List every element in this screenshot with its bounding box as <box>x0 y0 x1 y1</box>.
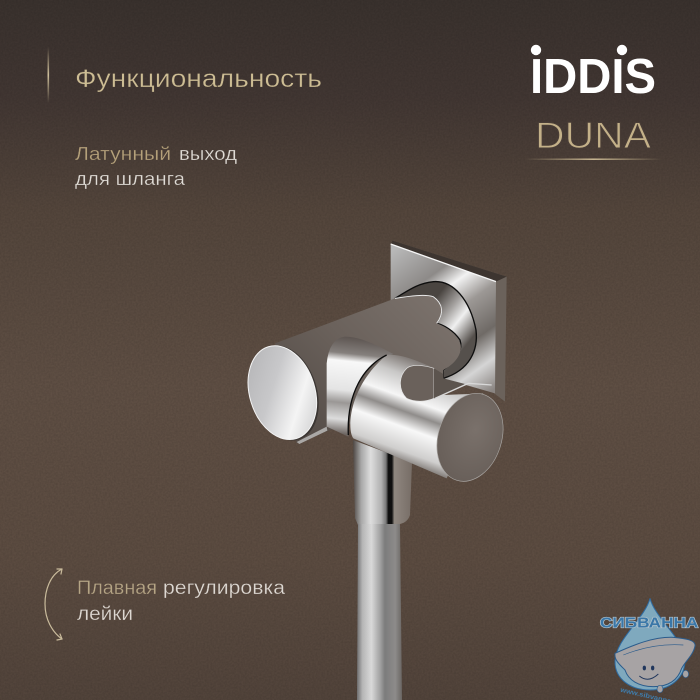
hose connector neck <box>353 440 412 525</box>
text block: smooth adjustment <box>77 578 285 625</box>
icon: rotation arrow <box>45 569 62 640</box>
seam <box>348 355 387 435</box>
front cap <box>237 337 330 449</box>
text block: smooth adjustment: регулировка <box>163 578 285 599</box>
bathtub <box>615 637 695 687</box>
text block: brass outlet: Латунный <box>75 144 171 164</box>
watermark logo: Sibvanna <box>600 598 699 700</box>
text block: smooth adjustment: лейки <box>77 604 133 625</box>
thin rail <box>435 383 492 398</box>
grey cylinder body <box>275 295 461 443</box>
notch <box>400 365 434 401</box>
text block: brass outlet: выход <box>179 144 238 164</box>
logo: IDDIS: IDDIS <box>530 50 656 104</box>
wall plate top edge shadow <box>391 241 507 282</box>
gap behind notch <box>434 368 465 398</box>
series name: DUNA: DUNA <box>535 115 651 156</box>
band under cap <box>297 427 327 444</box>
vertical gold accent line <box>48 47 49 103</box>
text block: smooth adjustment: Плавная <box>77 578 157 599</box>
brand name: СИБВАННА <box>600 615 699 632</box>
water drop <box>615 598 685 690</box>
holder ring <box>395 282 476 378</box>
hose <box>357 524 402 700</box>
sleeve end face <box>427 385 513 490</box>
bathtub feet <box>657 670 689 693</box>
wall plate edge <box>391 241 507 402</box>
wall plate face <box>391 244 496 393</box>
product: chrome shower hose outlet with holder <box>237 241 513 700</box>
holder assembly <box>237 241 513 490</box>
text block: brass outlet: для шланга <box>75 169 186 189</box>
light rim along notch <box>395 295 442 323</box>
sleeve back <box>327 337 393 437</box>
bathtub inner rim <box>623 645 683 655</box>
bathtub face <box>639 666 658 679</box>
gold divider under logo <box>525 158 662 160</box>
sleeve front <box>350 355 483 478</box>
plate top highlight <box>391 244 496 282</box>
heading: features: Функциональность <box>75 65 322 93</box>
text block: brass outlet <box>75 144 238 189</box>
